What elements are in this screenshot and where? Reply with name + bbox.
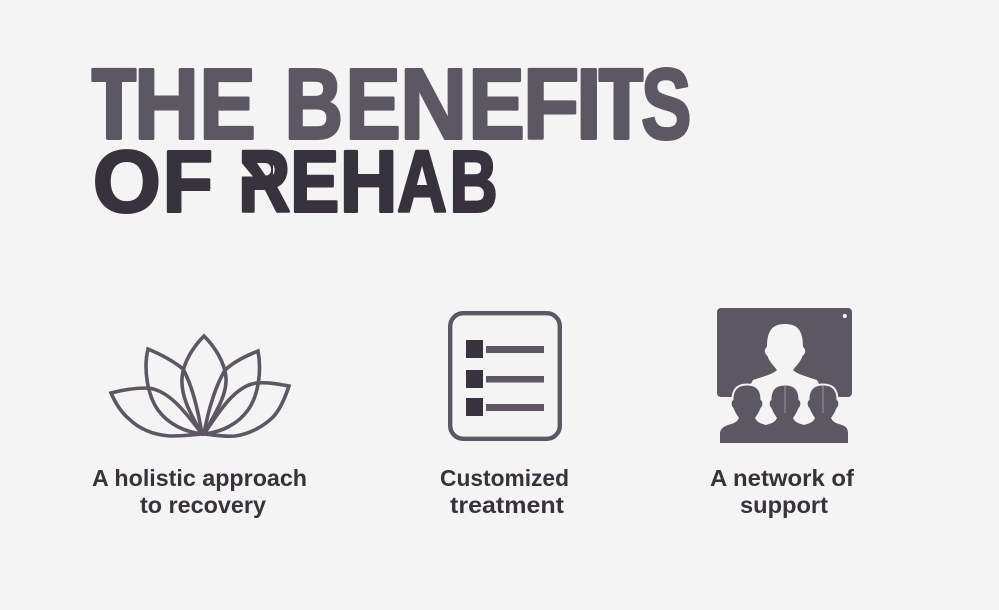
label: a network of support bbox=[710, 465, 854, 518]
panel: network of support bbox=[710, 308, 854, 518]
title line: the benefits: B bbox=[285, 48, 343, 160]
panel: holistic approach bbox=[92, 336, 307, 518]
title line: the benefits: E bbox=[199, 48, 256, 160]
label: a network of support: A network of bbox=[710, 465, 854, 491]
label: customized treatment bbox=[440, 465, 569, 518]
label: a holistic approach to recovery bbox=[92, 465, 307, 518]
title line: the benefits: E bbox=[468, 48, 525, 160]
title line: the benefits: N bbox=[400, 48, 467, 160]
title line: the benefits: H bbox=[134, 48, 199, 160]
label: a network of support: support bbox=[740, 492, 828, 518]
title line: of rehab: E bbox=[290, 134, 339, 230]
title line: the benefits: I bbox=[576, 48, 602, 160]
title bbox=[92, 48, 691, 230]
title line: of rehab: B bbox=[450, 134, 498, 230]
icon: lotus flower bbox=[111, 336, 289, 436]
title line: the benefits: S bbox=[641, 48, 691, 160]
icon: people in front of board bbox=[717, 308, 852, 443]
title line: of rehab: F bbox=[163, 134, 213, 230]
stylised R notch bbox=[240, 158, 273, 178]
label: a holistic approach to recovery: to recovery bbox=[140, 492, 266, 518]
title line: the benefits: T bbox=[92, 48, 136, 160]
T stem reinforcement bbox=[106, 70, 630, 140]
label: a holistic approach to recovery: A holistic approach bbox=[92, 465, 307, 491]
label: customized treatment: treatment bbox=[450, 492, 564, 518]
icon: checklist bbox=[450, 313, 560, 439]
title line: of rehab: O bbox=[93, 134, 161, 230]
title line: the benefits: E bbox=[345, 48, 401, 160]
panel: customized treatment bbox=[440, 313, 569, 518]
title line: of rehab: H bbox=[340, 134, 397, 230]
title line: the benefits: F bbox=[523, 48, 579, 160]
label: customized treatment: Customized bbox=[440, 465, 569, 491]
title line: of rehab: R bbox=[238, 134, 290, 230]
title line: of rehab: A bbox=[397, 134, 447, 230]
title line: the benefits: T bbox=[599, 48, 643, 160]
